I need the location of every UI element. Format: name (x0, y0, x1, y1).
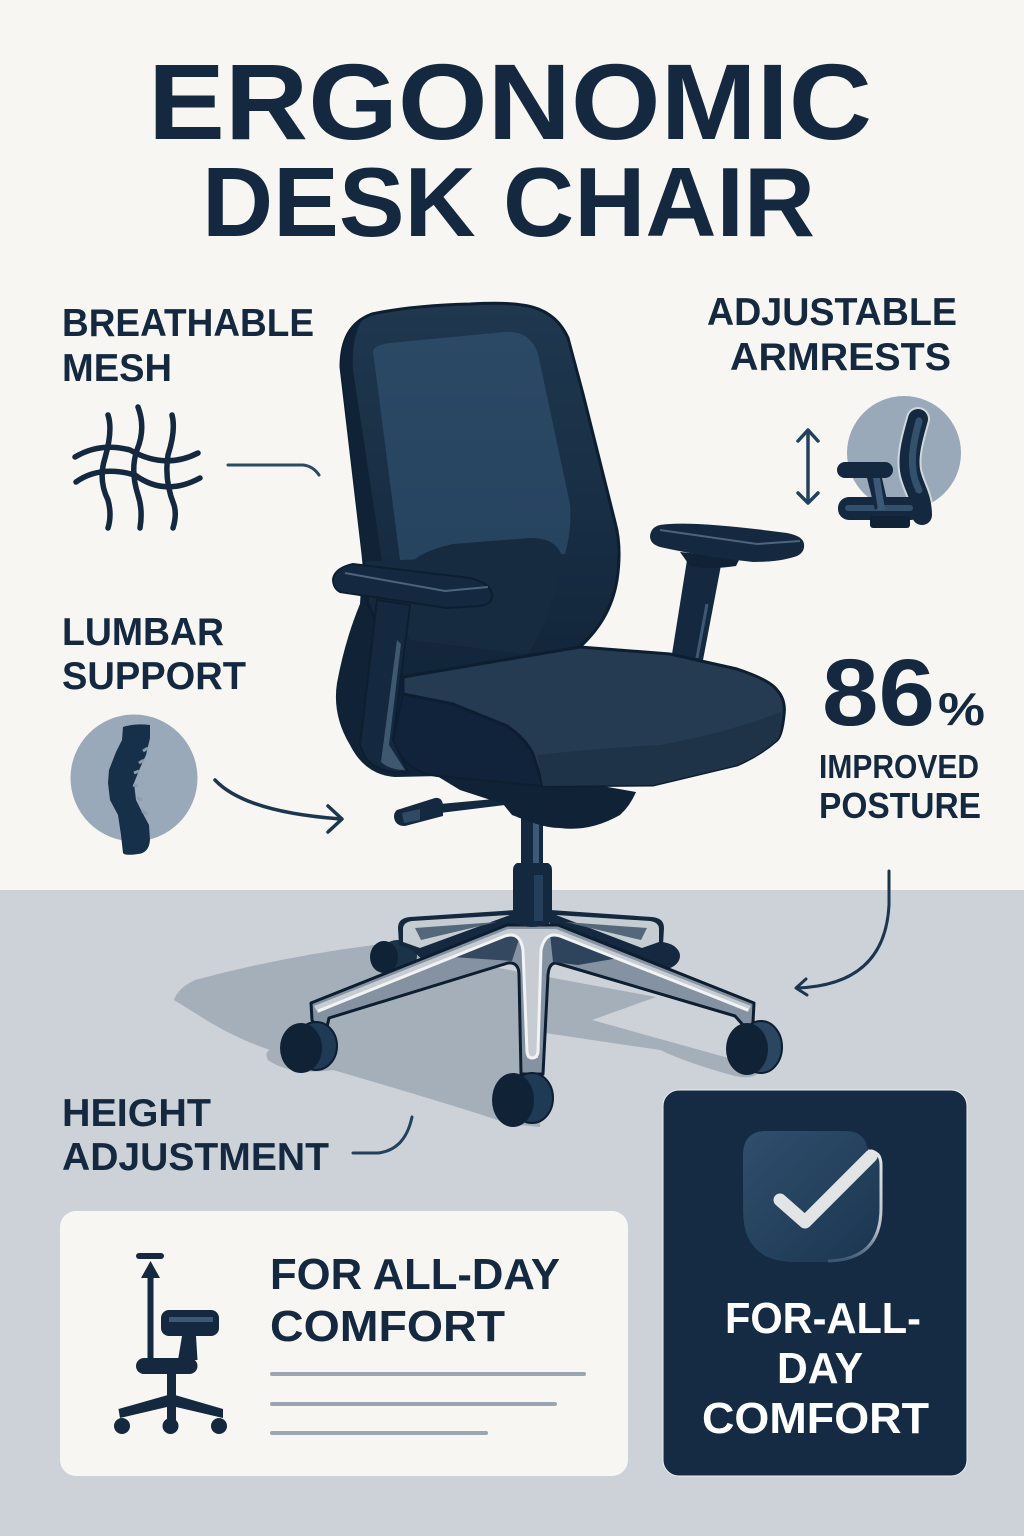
chair shadow on floor (174, 945, 760, 1127)
chair illustration (280, 303, 804, 1127)
back casters (370, 940, 680, 973)
label: lumbar support (62, 611, 246, 698)
seat cushion (393, 647, 784, 786)
panel: comfort check badge (663, 1090, 967, 1476)
badge text (702, 1294, 929, 1443)
stat: 86% improved posture (819, 640, 985, 826)
connector: mesh to backrest (228, 465, 319, 475)
back base arms (398, 910, 664, 962)
front casters (280, 1021, 782, 1127)
label: adjustable armrests: ARMRESTS (730, 336, 951, 379)
placeholder text lines (270, 1372, 586, 1435)
arrow: posture to base (796, 871, 889, 995)
five-star base (311, 925, 754, 1074)
seat mechanism (437, 775, 636, 829)
label: lumbar support: LUMBAR (62, 611, 224, 654)
badge text: DAY (777, 1344, 863, 1393)
label: height adjustment: HEIGHT (62, 1092, 211, 1135)
icon: armrest chair in circle (837, 396, 961, 528)
stat: 86% improved posture: POSTURE (819, 785, 981, 826)
label: adjustable armrests: ADJUSTABLE (707, 291, 957, 334)
title: ERGONOMIC (148, 41, 872, 162)
badge text: COMFORT (702, 1394, 929, 1443)
connector: height adjustment (353, 1117, 412, 1153)
floor band (0, 890, 1024, 1536)
mesh panel (373, 332, 570, 560)
stat: 86% improved posture: % (938, 683, 985, 735)
gas lift column (513, 815, 552, 927)
backrest (341, 303, 619, 677)
lever (394, 798, 505, 826)
arrow: lumbar to chair (215, 780, 342, 832)
icon: check mark tile (743, 1131, 881, 1262)
stat: 86% improved posture: IMPROVED (819, 748, 979, 785)
near armrest (333, 564, 492, 608)
icon: height-adjust chair (114, 1253, 227, 1434)
icon: mesh weave (75, 407, 200, 528)
icon: vertical double arrow (798, 430, 818, 503)
icon: lumbar spine in circle (70, 714, 198, 855)
far armrest and post (650, 524, 804, 660)
label: breathable mesh: MESH (62, 347, 172, 390)
stat: 86% improved posture: 86 (822, 640, 935, 746)
card heading: COMFORT (270, 1302, 505, 1351)
title: DESK CHAIR (202, 147, 815, 257)
badge text: FOR-ALL- (725, 1294, 921, 1343)
label: height adjustment (62, 1092, 329, 1179)
lumbar outer frame (336, 554, 440, 777)
label: breathable mesh (62, 302, 314, 390)
near arm post (360, 600, 410, 772)
card heading: FOR ALL-DAY (270, 1250, 560, 1299)
label: lumbar support: SUPPORT (62, 655, 246, 698)
label: height adjustment: ADJUSTMENT (62, 1136, 329, 1179)
label: adjustable armrests (707, 291, 957, 379)
label: breathable mesh: BREATHABLE (62, 302, 314, 345)
title (148, 41, 872, 257)
panel: for all-day comfort card (60, 1211, 628, 1476)
lumbar pad (390, 538, 561, 654)
card heading (270, 1250, 560, 1351)
